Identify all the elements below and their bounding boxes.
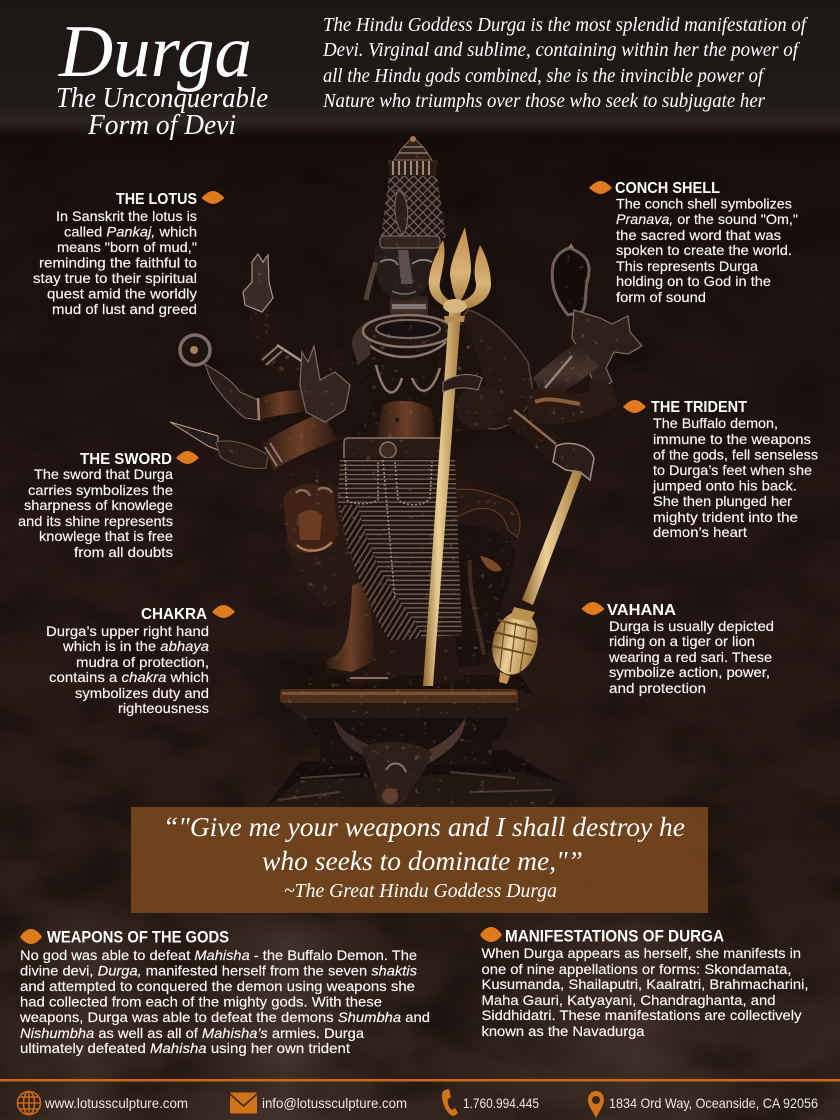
abhaya mudra hand <box>300 346 350 422</box>
arm with lotus <box>243 254 345 388</box>
body text: knowlege that is free <box>39 528 173 544</box>
body text: ultimately defeated Mahisha using her own trident <box>20 1040 350 1056</box>
email: info@lotussculpture.com <box>262 1095 407 1111</box>
arm with chakra <box>180 335 304 420</box>
subtitle: Form of Devi <box>87 109 236 141</box>
heading: VAHANA <box>607 602 676 619</box>
body text: mudra of protection, <box>76 654 209 670</box>
panel: the lotus <box>33 191 224 317</box>
neck and collar <box>363 296 453 347</box>
body text: one of nine appellations or forms: Skondamata, <box>482 961 792 977</box>
icon: leaf bullet <box>202 191 224 204</box>
body text: Pranava, or the sound "Om," <box>616 211 798 227</box>
body text <box>608 618 774 696</box>
body text: Siddhidatri. These manifestations are collectively <box>482 1007 802 1023</box>
buffalo head <box>333 718 465 806</box>
lion rear body and tail <box>452 489 520 668</box>
panel: the trident <box>623 399 818 540</box>
arm holding lower right ornament <box>524 378 618 424</box>
body text <box>33 208 197 317</box>
body text: Durga’s upper right hand <box>46 623 209 639</box>
icon: phone <box>442 1089 458 1116</box>
torso <box>342 314 504 462</box>
lion head and mane <box>279 467 376 672</box>
heading: WEAPONS OF THE GODS <box>47 928 229 946</box>
body text: The Buffalo demon, <box>653 415 778 431</box>
attribution: ~The Great Hindu Goddess Durga <box>284 880 557 902</box>
sculpture: bronze Durga with lion on pedestal <box>170 136 642 806</box>
body text: mighty trident into the <box>653 509 798 525</box>
subtitle: The Unconquerable <box>56 82 268 114</box>
body text: Durga is usually depicted <box>609 618 774 634</box>
body text: called Pankaj, which <box>64 224 197 240</box>
body text: righteousness <box>118 700 209 716</box>
body text: and attempted to conquered the demon using weapons she <box>20 978 415 994</box>
heading: THE LOTUS <box>116 191 197 208</box>
icon: leaf bullet <box>582 602 604 615</box>
body text <box>652 415 818 540</box>
body text: stay true to their spiritual <box>33 270 197 286</box>
body text: means "born of mud," <box>57 239 197 255</box>
icon: leaf bullet <box>20 929 42 944</box>
body text: holding on to God in the <box>616 273 771 289</box>
body text: demon’s heart <box>653 524 747 540</box>
quote text: who seeks to dominate me,"” <box>262 846 583 876</box>
body text: quest amid the worldly <box>47 286 197 302</box>
body text: The sword that Durga <box>34 466 173 482</box>
body text: She then plunged her <box>653 493 792 509</box>
body text: from all doubts <box>74 544 173 560</box>
arm with sword <box>170 412 338 470</box>
heading: CHAKRA <box>141 606 207 623</box>
body text: mud of lust and greed <box>52 301 197 317</box>
body text: riding on a tiger or lion <box>609 633 755 649</box>
subtitle <box>56 82 268 141</box>
golden trident <box>423 227 491 686</box>
phone number: 1.760.994.445 <box>463 1095 539 1111</box>
body text: symbolize action, power, <box>609 664 770 680</box>
body text: immune to the weapons <box>653 431 811 447</box>
body text: sharpness of knowlege <box>24 497 173 513</box>
heading: THE TRIDENT <box>651 399 747 416</box>
golden mace <box>486 470 582 684</box>
body text: contains a chakra which <box>49 669 209 685</box>
quote text <box>163 812 685 876</box>
feet <box>345 640 465 685</box>
body text <box>19 947 430 1056</box>
body text: symbolizes duty and <box>75 685 209 701</box>
body text <box>482 945 808 1039</box>
heading: CONCH SHELL <box>615 180 720 197</box>
body text: divine devi, Durga, manifested herself from the seven shaktis <box>20 962 417 978</box>
panel: manifestations of Durga <box>480 927 808 1039</box>
quote text: “"Give me your weapons and I shall destroy he <box>163 812 685 842</box>
body text: Kusumanda, Shailaputri, Kaalratri, Brahmacharini, <box>482 976 808 992</box>
footer: contact bar <box>0 1079 840 1118</box>
icon: leaf bullet <box>480 927 502 942</box>
intro paragraph: all the Hindu gods combined, she is the invincible power of <box>323 65 766 87</box>
title: Durga <box>56 11 268 141</box>
body text: No god was able to defeat Mahisha - the Buffalo Demon. The <box>20 947 417 963</box>
panel: chakra <box>46 605 235 716</box>
body text: had collected from each of the mighty gods. With these <box>20 994 382 1010</box>
intro paragraph: Devi. Virginal and sublime, containing within her the power of <box>322 39 801 61</box>
heading: THE SWORD <box>80 451 172 468</box>
panel: conch shell <box>589 180 798 305</box>
body text: When Durga appears as herself, she manifests in <box>482 945 801 961</box>
hand gripping trident <box>443 375 482 392</box>
heading: MANIFESTATIONS OF DURGA <box>505 928 724 946</box>
icon: leaf bullet <box>623 400 646 413</box>
long arm resting on mace <box>495 404 594 480</box>
body text: This represents Durga <box>616 258 758 274</box>
body text: The conch shell symbolizes <box>616 196 792 212</box>
panel: the sword <box>18 451 199 560</box>
address: 1834 Ord Way, Oceanside, CA 92056 <box>609 1095 818 1111</box>
body text: form of sound <box>616 289 706 305</box>
body text: spoken to create the world. <box>616 242 792 258</box>
icon: leaf bullet <box>212 605 235 618</box>
icon: envelope <box>230 1092 257 1114</box>
body text: Nishumbha as well as all of Mahisha’s armies. Durga <box>20 1025 364 1041</box>
panel: weapons of the gods <box>19 928 430 1056</box>
skirt with pleats <box>338 458 462 642</box>
crown <box>380 136 446 248</box>
body text: and protection <box>609 680 706 696</box>
body text: known as the Navadurga <box>482 1023 645 1039</box>
body text: In Sanskrit the lotus is <box>56 208 197 224</box>
body text: weapons, Durga was able to defeat the demons Shumbha and <box>19 1009 430 1025</box>
body text: reminding the faithful to <box>39 254 197 270</box>
body text: the sacred word that was <box>616 227 781 243</box>
cape behind right shoulder <box>452 310 534 429</box>
pedestal with buffalo head <box>267 675 567 806</box>
body text: jumped onto his back. <box>652 478 797 494</box>
head <box>366 245 435 300</box>
body text: of the gods, fell senseless <box>653 446 818 462</box>
arm with conch shell <box>533 243 642 402</box>
callout: quote from Durga <box>131 807 708 913</box>
icon: leaf bullet <box>589 181 612 194</box>
body text: to Durga’s feet when she <box>653 462 812 478</box>
body text: carries symbolizes the <box>28 482 173 498</box>
body text <box>18 466 173 560</box>
body text: which is in the abhaya <box>62 638 209 654</box>
body text: Maha Gauri, Katyayani, Chandraghanta, and <box>482 992 776 1008</box>
title: Durga: Durga <box>58 11 252 93</box>
intro paragraph <box>322 14 809 112</box>
body text: wearing a red sari. These <box>608 649 772 665</box>
icon: leaf bullet <box>176 451 199 464</box>
body text <box>46 623 209 716</box>
intro paragraph: Nature who triumphs over those who seek to subjugate her <box>322 90 766 112</box>
icon: map pin <box>588 1091 604 1118</box>
intro paragraph: The Hindu Goddess Durga is the most splendid manifestation of <box>323 14 809 36</box>
body text: and its shine represents <box>18 513 173 529</box>
icon: globe <box>18 1092 40 1114</box>
panel: vahana <box>582 602 774 696</box>
website: www.lotussculpture.com <box>44 1095 188 1111</box>
body text <box>616 196 798 305</box>
